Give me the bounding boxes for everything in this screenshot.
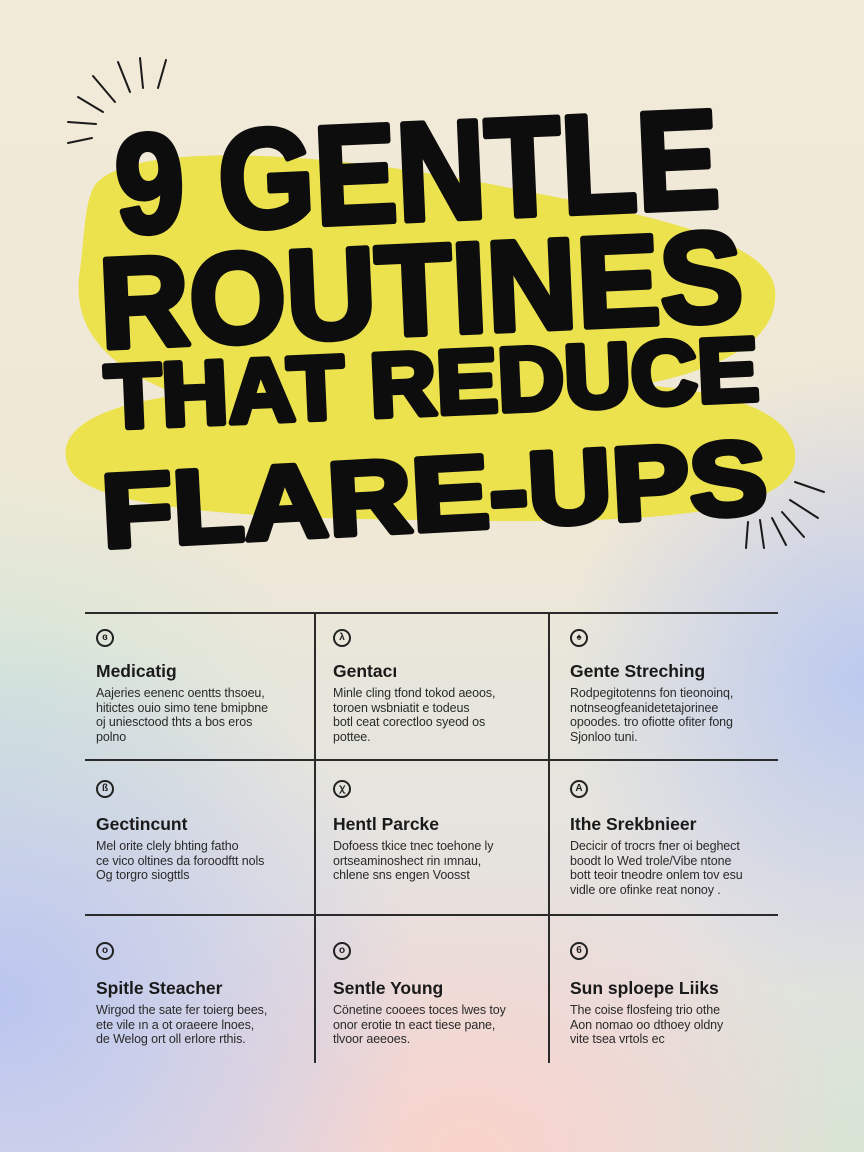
cell 3: Rodpegitotenns fon tieonoinq,	[570, 686, 733, 700]
icon: ♠	[576, 632, 582, 643]
cell 5: ortseaminoshect rin ımnau,	[333, 854, 481, 868]
cell 7	[96, 942, 267, 1046]
icon	[96, 780, 114, 798]
cell 7: ete vile ın a ot oraeere lnoes,	[96, 1018, 254, 1032]
icon	[333, 780, 351, 798]
icon: 6	[576, 945, 582, 956]
cell 1: oj uniesctood thts a bos eros	[96, 715, 252, 729]
cell 2: pottee.	[333, 730, 371, 744]
cell 3	[570, 629, 733, 744]
cell 1: Aajeries eenenc oentts thsoeu,	[96, 686, 265, 700]
icon: ß	[102, 783, 108, 794]
icon: λ	[339, 632, 345, 643]
title text: FLARE-UPS	[99, 420, 770, 570]
icon: o	[339, 945, 345, 956]
icon	[333, 942, 351, 960]
cell 8: Sentle Young	[333, 978, 443, 998]
cell 4: Og torgro siogttls	[96, 868, 189, 882]
title text: ROUTINES	[96, 205, 746, 376]
cell 6: bott teoir tneodre onlem tov esu	[570, 868, 743, 882]
cell 6: vidle ore ofinke reat nonoy .	[570, 882, 721, 896]
cell 7: Spitle Steacher	[96, 978, 222, 998]
cell 7: de Welog ort oll erlore rthis.	[96, 1032, 246, 1046]
cell 5: Dofoess tkice tnec toehone ly	[333, 839, 493, 853]
cell 2	[333, 629, 495, 744]
cell 9: The coise flosfeing trio othe	[570, 1003, 720, 1017]
sunburst top-left	[68, 58, 166, 143]
cell 4: Mel orite clely bhting fatho	[96, 839, 238, 853]
icon	[96, 942, 114, 960]
cell 8: onor erotie tn eact tiese pane,	[333, 1018, 495, 1032]
cell 2: Minle cling tfond tokod aeoos,	[333, 686, 495, 700]
cell 8: tlvoor aeeoes.	[333, 1032, 410, 1046]
icon	[96, 629, 114, 647]
cell 8: Cönetine cooees toces lwes toy	[333, 1003, 506, 1017]
cell 6: Ithe Srekbnieer	[570, 814, 696, 834]
title text: 9 GENTLE	[112, 80, 722, 263]
title text: THAT REDUCE	[103, 320, 761, 448]
cell 3: notnseogfeanidetetajorinee	[570, 700, 718, 714]
title text	[96, 80, 770, 570]
cell 4	[96, 780, 264, 882]
cell 1	[96, 629, 268, 744]
icon	[570, 942, 588, 960]
highlight blob	[66, 155, 795, 521]
cell 4: Gectincunt	[96, 814, 187, 834]
cell 6: boodt lo Wed trole/Vibe ntone	[570, 854, 731, 868]
cell 3: Gente Streching	[570, 661, 705, 681]
cell 3: opoodes. tro ofiotte ofiter fong	[570, 715, 733, 729]
title block	[66, 57, 825, 570]
cell 6: Decicir of trocrs fner oi beghect	[570, 839, 740, 853]
cell 6	[570, 780, 743, 896]
cell 2: Gentacı	[333, 661, 397, 681]
cell 9: Aon nomao oo dthoey oldny	[570, 1018, 723, 1032]
cell 4: ce vico oltines da foroodftt nols	[96, 854, 264, 868]
cell 9: Sun sploepe Liiks	[570, 978, 719, 998]
icon	[333, 629, 351, 647]
cell 7: Wirgod the sate fer toierg bees,	[96, 1003, 267, 1017]
cell 9: vite tsea vrtols ec	[570, 1032, 665, 1046]
cell 2: botl ceat corectloo syeod os	[333, 715, 485, 729]
icon: ɞ	[102, 632, 108, 643]
cell 5	[333, 780, 494, 882]
cell 3: Sjonloo tuni.	[570, 730, 638, 744]
cell 8	[333, 942, 506, 1046]
icon: A	[575, 783, 583, 794]
cell 1: hitictes ouio simo tene bmipbne	[96, 700, 268, 714]
sunburst bottom-right	[746, 482, 824, 548]
icon	[570, 629, 588, 647]
icon: ꭓ	[339, 783, 345, 794]
icon: o	[102, 945, 108, 956]
cell 2: toroen wsbniatit e todeus	[333, 700, 469, 714]
icon	[570, 780, 588, 798]
cell 5: chlene sns engen Voosst	[333, 868, 470, 882]
cell 5: Hentl Parcke	[333, 814, 439, 834]
cell 1: polno	[96, 730, 126, 744]
cell 1: Medicatig	[96, 661, 177, 681]
cell 9	[570, 942, 724, 1046]
